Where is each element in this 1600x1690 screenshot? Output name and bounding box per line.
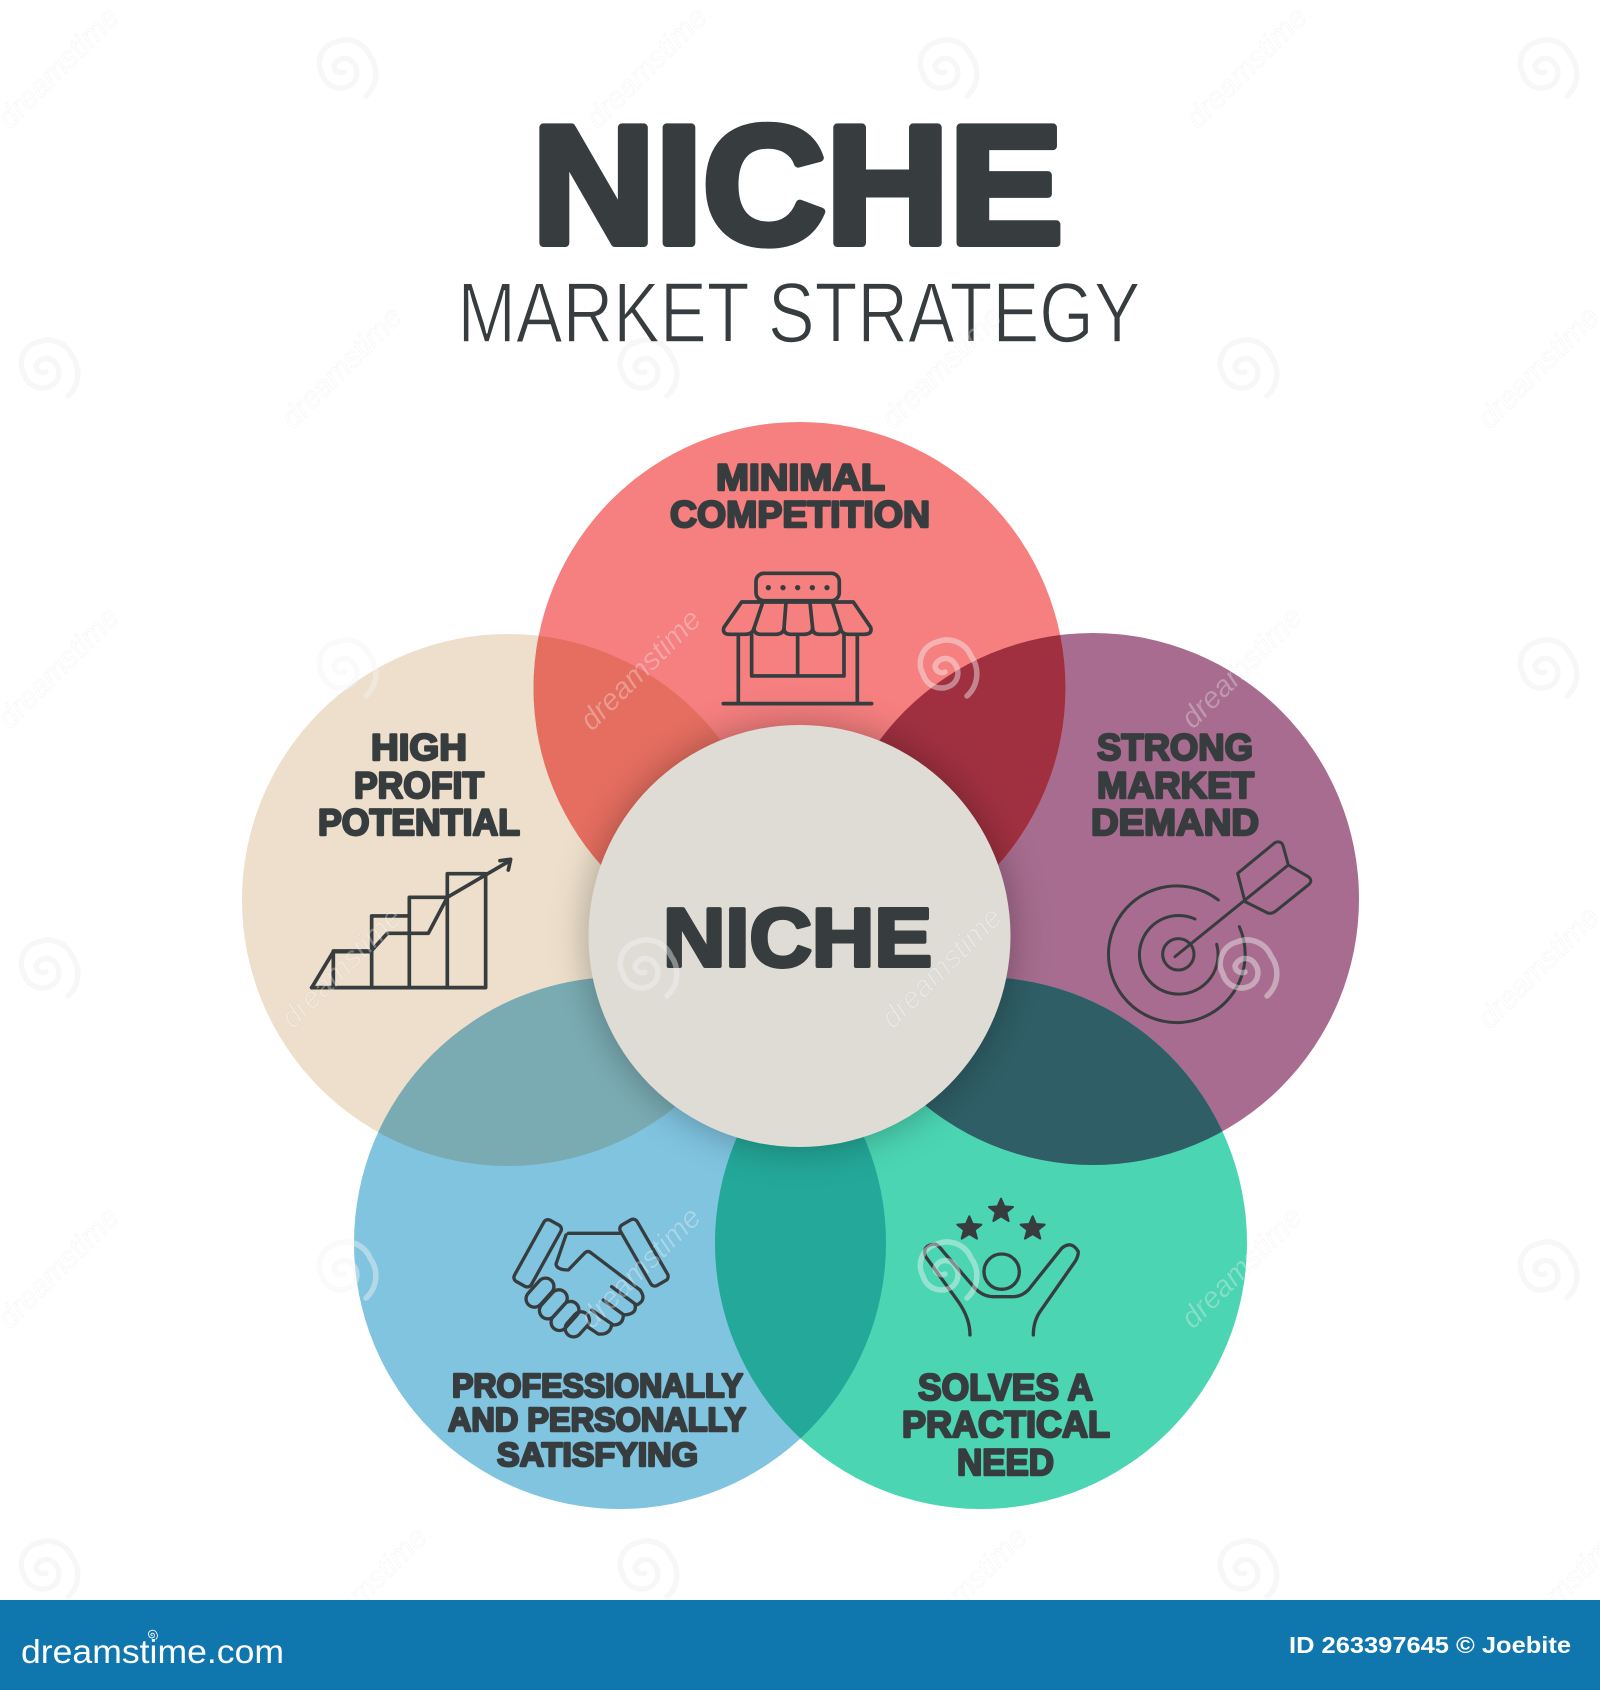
watermark: dreamstime: [900, 1521, 1034, 1655]
center circle: [588, 725, 1010, 1147]
watermark: dreamstime: [875, 901, 1009, 1035]
watermark: dreamstime: [1180, 1, 1314, 135]
footer banner: [0, 1600, 1600, 1690]
label: professionally and personally satisfying: AND PERSONALLY: [448, 1401, 746, 1438]
watermark: dreamstime: [275, 301, 409, 435]
label: strong market demand: STRONG: [1097, 727, 1253, 768]
overlap: purple and green: [925, 978, 1222, 1165]
label: strong market demand: [1091, 727, 1259, 843]
label: high profit potential: [318, 727, 520, 843]
label: professionally and personally satisfying: PROFESSIONALLY: [452, 1367, 743, 1404]
label: solves a practical need: NEED: [957, 1442, 1054, 1483]
label: solves a practical need: [902, 1367, 1110, 1483]
icon: growth chart: [312, 859, 511, 988]
watermark: dreamstime: [574, 603, 708, 737]
label: minimal competition: MINIMAL: [716, 457, 885, 498]
label: professionally and personally satisfying: SATISFYING: [497, 1436, 698, 1473]
icon: happy person with stars: [925, 1199, 1078, 1335]
watermark: dreamstime: [1175, 601, 1309, 735]
watermark: dreamstime: [275, 901, 409, 1035]
circle: strong market demand: [827, 633, 1359, 1165]
label: minimal competition: COMPETITION: [670, 494, 930, 535]
label: high profit potential: HIGH: [371, 727, 467, 768]
icon: storefront: [723, 573, 872, 704]
circle: solves a practical need: [715, 977, 1247, 1509]
subtitle: MARKET STRATEGY: [458, 266, 1140, 361]
watermark: dreamstime: [300, 1521, 434, 1655]
center label: NICHE: [663, 891, 932, 984]
overlap: red and purple: [879, 635, 1066, 865]
overlap: beige and blue: [378, 978, 676, 1166]
icon: handshake: [512, 1218, 670, 1340]
watermark: dreamstime: [1175, 1201, 1309, 1335]
label: professionally and personally satisfying: [448, 1367, 746, 1473]
watermark: dreamstime: [875, 301, 1009, 435]
overlap: red and beige: [534, 636, 720, 865]
label: strong market demand: MARKET: [1097, 765, 1254, 806]
footer logo spiral: [148, 1630, 157, 1639]
icon: target and dart: [1108, 842, 1311, 1023]
overlap: blue and green: [715, 1137, 886, 1438]
title: NICHE: [532, 91, 1063, 279]
venn diagram: [242, 422, 1359, 1509]
circle: high profit potential: [242, 634, 774, 1166]
circle: professionally and personally satisfying: [354, 977, 886, 1509]
footer credit: ID 263397645 © Joebite: [1289, 1632, 1571, 1658]
label: solves a practical need: PRACTICAL: [902, 1404, 1110, 1445]
label: minimal competition: [670, 457, 930, 535]
watermark: dreamstime: [574, 1201, 708, 1335]
label: high profit potential: POTENTIAL: [318, 802, 520, 843]
footer logo text: dreamstime.com: [21, 1633, 284, 1670]
center shadow: [586, 723, 1012, 1149]
circle: minimal competition: [534, 422, 1066, 954]
label: high profit potential: PROFIT: [354, 765, 484, 806]
label: solves a practical need: SOLVES A: [918, 1367, 1093, 1408]
watermark: dreamstime: [580, 1, 714, 135]
label: strong market demand: DEMAND: [1091, 802, 1259, 843]
